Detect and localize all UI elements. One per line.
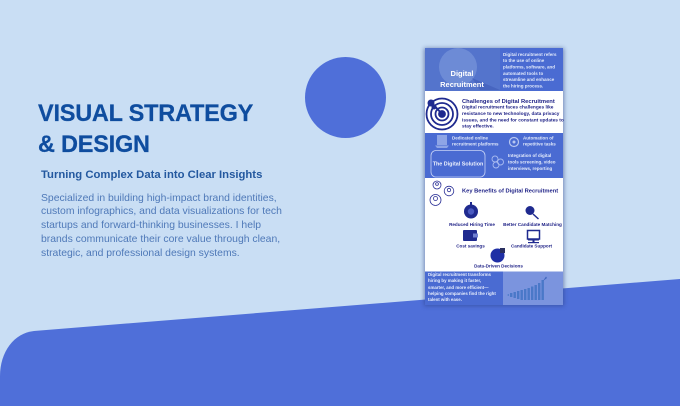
panel: conclusion: Digital recruitment transforms <box>428 272 492 277</box>
panel: digital solution: tools screening, video <box>508 160 556 164</box>
label box: The Digital Solution: The Digital Solution <box>433 162 483 168</box>
panel: key benefits: Key Benefits of Digital Recruitment <box>462 188 558 194</box>
decorative circle <box>305 57 386 138</box>
icon: monitor <box>528 230 540 243</box>
panel: conclusion: helping companies find the right <box>428 291 496 296</box>
panel: digital recruitment intro: Digital <box>451 69 473 78</box>
icon: gear <box>510 138 518 146</box>
panel: challenges: resistance to new technology, data privacy <box>462 111 560 117</box>
panel: challenges: stay effective. <box>462 124 494 130</box>
title: VISUAL STRATEGY <box>38 100 253 127</box>
panel: conclusion: hiring by making it faster, <box>428 278 481 283</box>
icon: network <box>492 156 504 168</box>
subtitle: Turning Complex Data into Clear Insights <box>41 169 262 181</box>
icon: wallet <box>463 230 478 241</box>
panel: challenges: Digital recruitment faces challenges like <box>462 104 554 110</box>
body text: strategic, and professional design systems. <box>41 248 240 259</box>
body text <box>41 192 282 259</box>
body text: custom infographics, and data visualizations for tech <box>41 206 282 217</box>
panel: digital recruitment intro: platforms, software, and <box>503 64 555 70</box>
panel: digital solution: interviews, reporting <box>508 166 553 171</box>
body text: Specialized in building high-impact brand identities, <box>41 192 277 204</box>
icon: pie chart <box>490 248 505 262</box>
panel: key benefits: Data-Driven Decisions <box>474 264 523 268</box>
icon: magnifier <box>526 206 538 219</box>
panel: digital recruitment intro <box>425 48 563 91</box>
panel: challenges <box>425 91 564 133</box>
panel: challenges: Challenges of Digital Recruitment <box>462 99 555 105</box>
title: & DESIGN <box>38 131 150 158</box>
panel: digital solution <box>425 133 563 178</box>
panel: digital recruitment intro: Digital recruitment refers <box>503 52 557 57</box>
panel: conclusion: talent with ease. <box>428 297 462 302</box>
panel: digital recruitment intro: automated tools to <box>503 71 544 76</box>
panel: key benefits <box>425 178 563 272</box>
panel: digital recruitment intro: streamline and enhance <box>503 77 555 82</box>
panel: challenges: issues, and the need for constant updates to <box>462 118 564 124</box>
panel: digital solution: Integration of digital <box>508 153 551 158</box>
panel: digital solution: recruitment platforms <box>452 142 499 147</box>
panel: digital solution: repetitive tasks <box>523 142 556 147</box>
icon: stopwatch <box>464 202 478 218</box>
panel: digital solution: Dedicated online <box>452 136 489 140</box>
chart: growth bars <box>507 276 547 300</box>
panel: conclusion <box>425 272 563 305</box>
title <box>38 100 254 158</box>
panel: key benefits: Reduced Hiring Time <box>449 222 495 227</box>
body text: brands communicate their core value through clean, <box>41 234 280 245</box>
icon: target <box>426 98 458 130</box>
panel: key benefits: Better Candidate Matching <box>503 222 562 227</box>
panel: digital recruitment intro: the hiring process. <box>503 84 543 88</box>
icon: people <box>430 181 454 206</box>
panel: key benefits: Candidate Support <box>511 244 553 248</box>
infographic poster <box>421 45 567 308</box>
panel: key benefits: Cost savings <box>456 244 485 248</box>
icon: laptop <box>435 135 449 148</box>
panel: digital recruitment intro: Recruitment <box>440 80 484 89</box>
panel: digital recruitment intro: to the use of online <box>503 58 545 63</box>
body text: startups and forward-thinking businesses. I help <box>41 220 261 231</box>
panel: digital solution: Automation of <box>523 136 554 140</box>
panel: conclusion: smarter, and more efficient— <box>428 285 489 290</box>
